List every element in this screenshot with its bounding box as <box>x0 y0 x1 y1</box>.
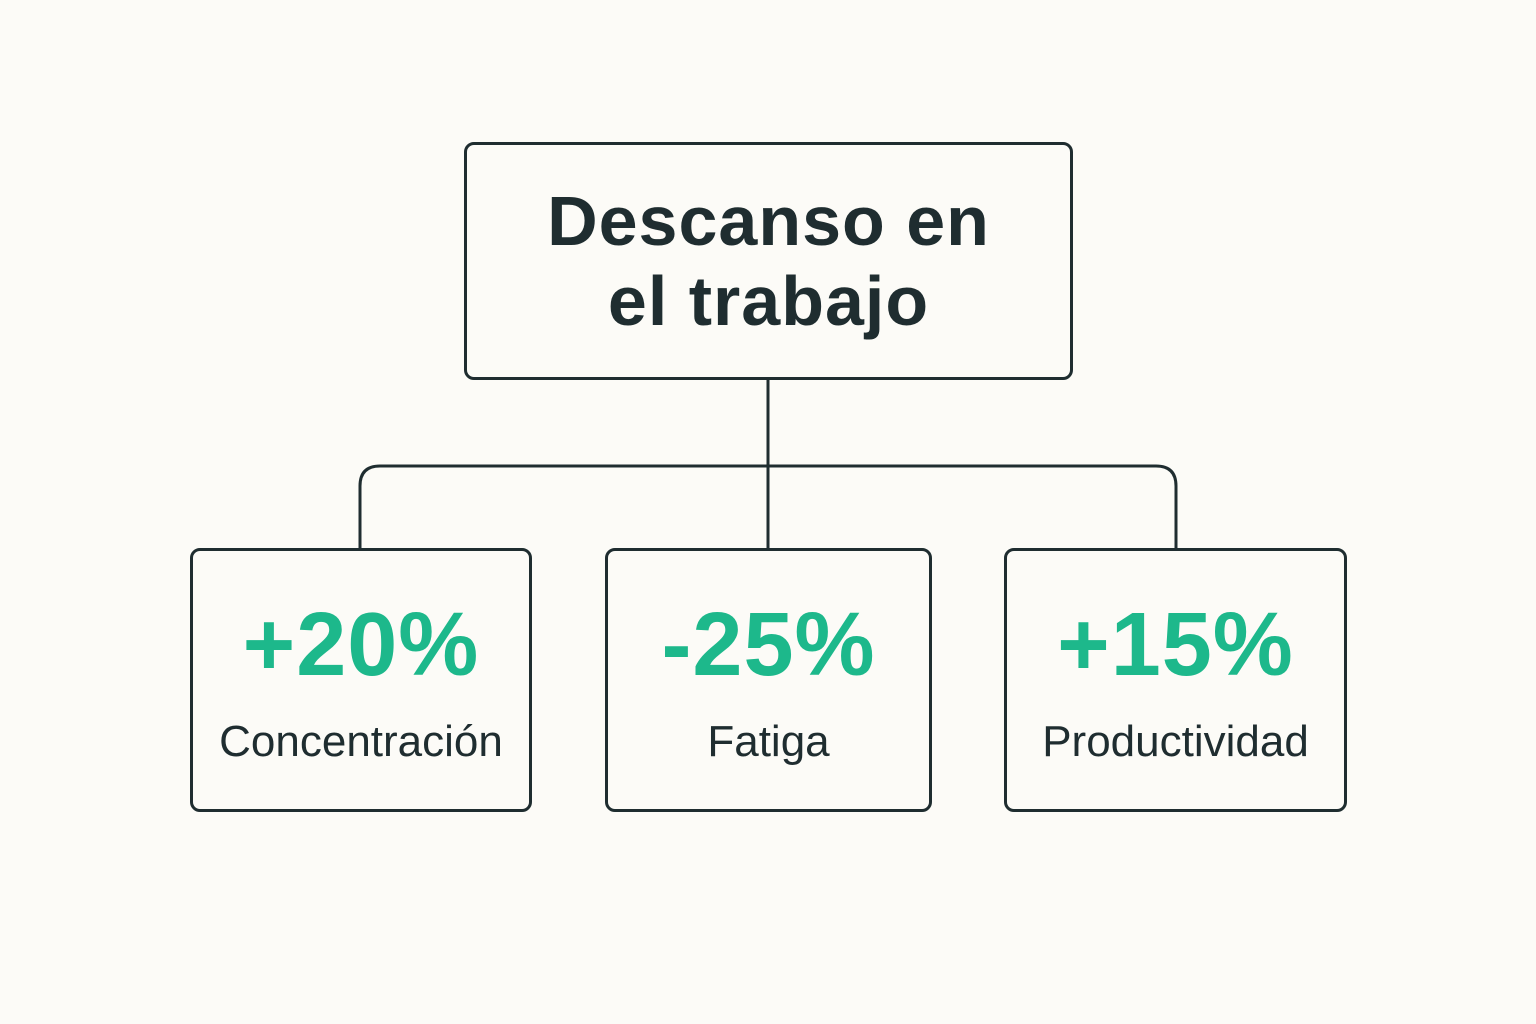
title box <box>464 142 1073 380</box>
title box: el trabajo <box>608 262 929 340</box>
stat label: Fatiga <box>707 717 830 766</box>
stat number: -25% <box>661 595 876 695</box>
title box: Descanso en <box>547 182 990 260</box>
panel: productividad <box>1004 548 1347 812</box>
panel: concentración <box>190 548 532 812</box>
stat label: Productividad <box>1042 717 1309 766</box>
stat number: +20% <box>243 595 479 695</box>
stat label: Concentración <box>219 717 503 766</box>
panel: fatiga <box>605 548 932 812</box>
stat number: +15% <box>1057 595 1294 695</box>
